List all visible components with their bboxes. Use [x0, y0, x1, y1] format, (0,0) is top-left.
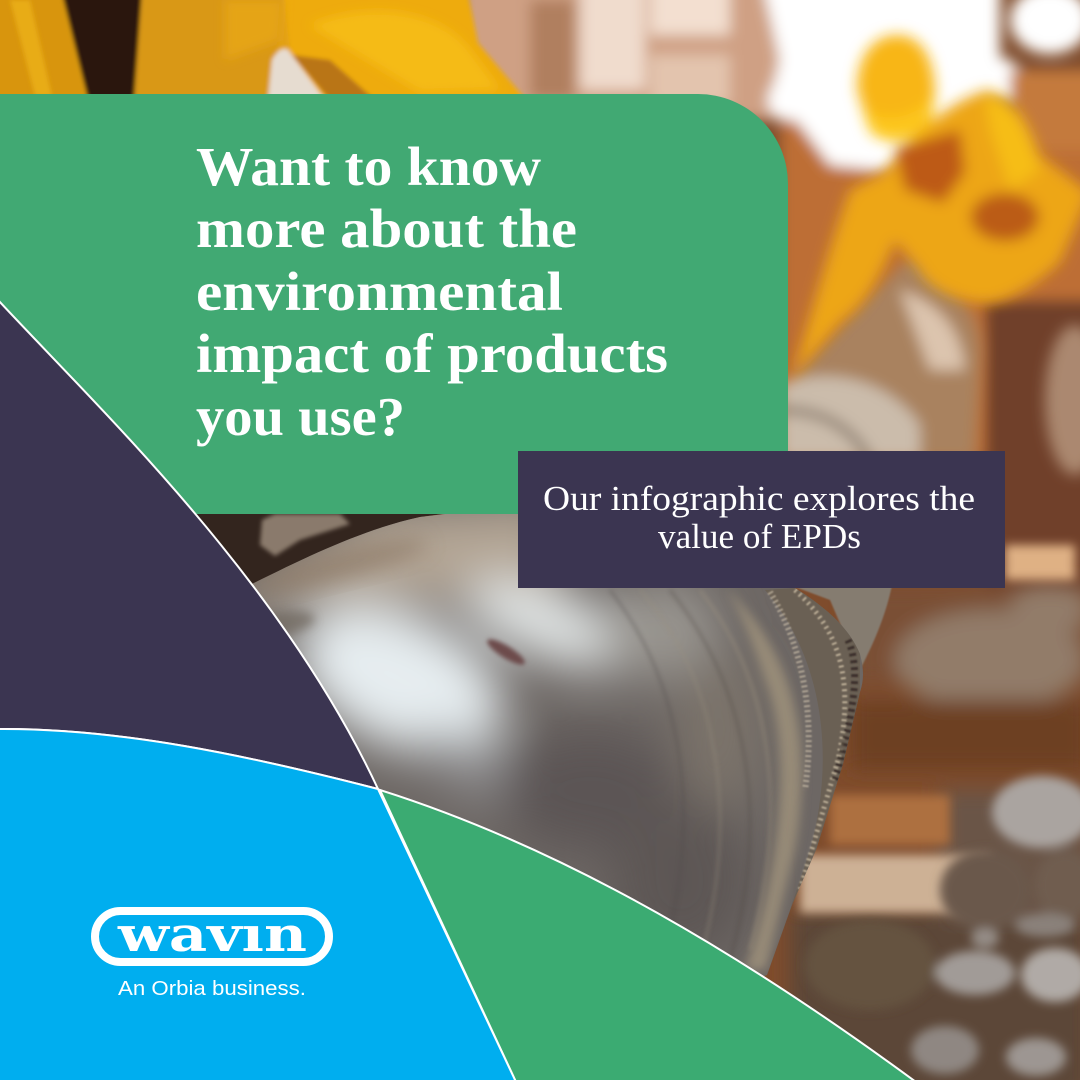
logo: Wavin, an Orbia business: wavın [117, 907, 307, 963]
photo: wooden planks [800, 545, 1075, 913]
title: impact of products [196, 323, 668, 384]
photo: blurred site background [460, 0, 1080, 600]
title: you use? [196, 386, 405, 447]
callout: infographic note [518, 451, 1005, 588]
photo: worker at upper right [792, 35, 1080, 378]
logo: Wavin, an Orbia business: An Orbia business. [118, 978, 306, 1000]
logo: Wavin, an Orbia business [95, 907, 329, 1000]
shape: blue curved panel [0, 729, 516, 1080]
photo: pipe weld mark [485, 636, 527, 667]
title: Want to know [196, 136, 541, 197]
photo: pipe streaks [610, 590, 770, 960]
photo: yellow jacket at top left [0, 0, 526, 100]
photo: ground behind pipe [790, 585, 1080, 1080]
photo: main pipe [252, 514, 863, 976]
photo: dark ledge above pipe [190, 505, 510, 590]
callout: infographic note: value of EPDs [658, 517, 861, 556]
photo: pipe behind rim [790, 585, 892, 670]
photo: rocks [805, 776, 1080, 1076]
callout: infographic note: Our infographic explores the [543, 479, 975, 518]
shape: green curved panel [380, 790, 916, 1080]
title: environmental [196, 261, 563, 322]
title [196, 136, 668, 447]
title: more about the [196, 198, 577, 259]
shape: navy curved panel [0, 300, 378, 789]
photo: distant pipe section [780, 255, 1080, 475]
panel: green headline panel [0, 94, 788, 514]
photo: pipe rim band [726, 588, 802, 970]
